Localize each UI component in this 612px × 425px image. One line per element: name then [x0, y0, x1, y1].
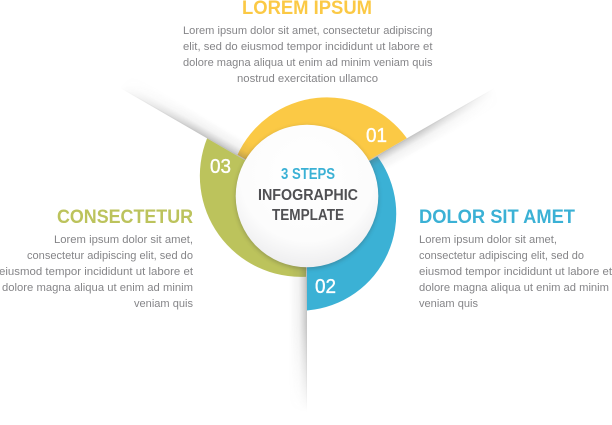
center circle	[236, 125, 378, 267]
body: Dolor Sit Amet: Lorem ipsum dolor sit amet,	[419, 234, 557, 246]
body: Dolor Sit Amet: dolore magna aliqua ut enim ad minim	[419, 282, 609, 294]
body: Consectetur: dolore magna aliqua ut enim ad minim	[2, 282, 193, 294]
center label: INFOGRAPHIC	[258, 187, 358, 204]
body: Lorem Ipsum: dolore magna aliqua ut enim ad minim veniam quis	[183, 57, 433, 69]
body: Dolor Sit Amet: consectetur adipiscing elit, sed do	[419, 250, 584, 262]
body: Consectetur: consectetur adipiscing elit, sed do	[27, 250, 193, 262]
body: Lorem Ipsum: nostrud exercitation ullamco	[237, 73, 378, 85]
body: Dolor Sit Amet	[419, 234, 612, 310]
body: Lorem Ipsum	[183, 25, 433, 85]
body: Lorem Ipsum: Lorem ipsum dolor sit amet, consectetur adipiscing	[183, 25, 432, 37]
center label: TEMPLATE	[272, 207, 344, 224]
number 03: 03	[210, 156, 231, 178]
segment: green step 03	[200, 138, 307, 277]
shadow: upper-right divider	[307, 88, 504, 213]
shadow: bottom divider	[287, 196, 307, 412]
text block: Dolor Sit Amet	[419, 206, 612, 310]
body: Consectetur	[0, 234, 193, 310]
body: Consectetur: eiusmod tempor incididunt ut labore et	[0, 266, 193, 278]
segment: blue step 02	[307, 156, 396, 310]
body: Lorem Ipsum: elit, sed do eiusmod tempor incididunt ut labore et	[183, 41, 432, 53]
body: Dolor Sit Amet: veniam quis	[419, 298, 478, 310]
body: Dolor Sit Amet: eiusmod tempor incididunt ut labore et	[419, 266, 612, 278]
circle shadow	[236, 126, 378, 269]
segment: yellow step 01	[237, 97, 407, 196]
body: Consectetur: Lorem ipsum dolor sit amet,	[54, 234, 193, 246]
text block: Lorem Ipsum	[183, 0, 433, 85]
heading: Consectetur: CONSECTETUR	[57, 206, 193, 228]
number 01: 01	[366, 125, 387, 147]
heading: Dolor Sit Amet: DOLOR SIT AMET	[419, 206, 575, 228]
center label	[258, 166, 358, 224]
center label: 3 STEPS	[281, 166, 335, 183]
body: Consectetur: veniam quis	[134, 298, 193, 310]
text block: Consectetur	[0, 206, 193, 310]
shadow: upper-left divider	[120, 71, 317, 196]
number 02: 02	[315, 276, 336, 298]
